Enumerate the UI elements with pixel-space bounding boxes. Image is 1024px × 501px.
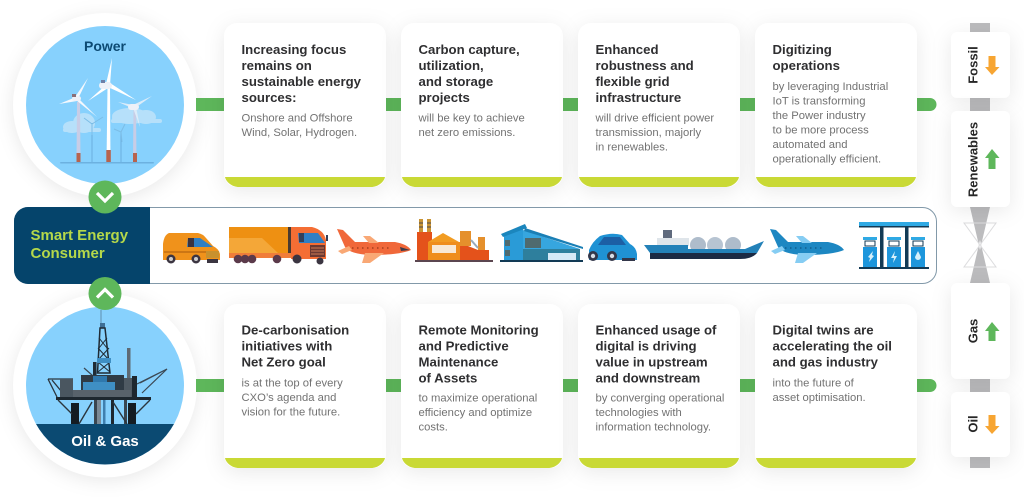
text block: Net Zero goal xyxy=(242,354,326,370)
panel: card enhanced usage of digital xyxy=(578,304,740,468)
icon: truck xyxy=(229,227,328,264)
panel: card grid infrastructure xyxy=(578,23,740,187)
heading: Smart Energy Consumer xyxy=(30,227,129,262)
button: chevron down xyxy=(88,180,122,214)
icon: down arrow xyxy=(985,415,1000,434)
panel: card digital twins xyxy=(755,304,917,468)
text block: into the future of xyxy=(772,378,855,390)
icon: wind turbines xyxy=(59,58,162,164)
icon: blue plane xyxy=(770,229,844,263)
text block: sustainable energy xyxy=(242,74,362,89)
text block: Digitizing xyxy=(772,42,832,57)
panel: card increasing focus xyxy=(224,23,386,187)
text block: Carbon capture, xyxy=(418,42,520,57)
text block: De-carbonisation xyxy=(242,322,349,338)
icon: LNG tanker ship xyxy=(644,230,764,259)
text block: to be more process xyxy=(772,124,869,136)
connectors: green links of top row xyxy=(196,98,937,111)
text block: net zero emissions. xyxy=(418,127,515,139)
text block xyxy=(242,42,362,139)
connectors: green links of bottom row xyxy=(196,379,937,392)
text block: will drive efficient power xyxy=(594,112,714,124)
text block: Digital twins are xyxy=(772,322,874,338)
icon: factory xyxy=(415,219,493,262)
panel: side label renewables xyxy=(951,111,1010,207)
text block: CXO’s agenda and xyxy=(242,392,336,404)
text block: initiatives with xyxy=(242,338,332,354)
panel: card de-carbonisation xyxy=(224,304,386,468)
text block: Increasing focus xyxy=(242,42,346,57)
text block: and downstream xyxy=(596,370,700,386)
text block: flexible grid xyxy=(596,74,670,89)
text block: utilization, xyxy=(418,58,484,73)
text block: value in upstream xyxy=(596,354,708,370)
text block: infrastructure xyxy=(596,90,681,105)
panel: side label oil xyxy=(951,392,1010,457)
text block: projects xyxy=(418,90,470,105)
text block: in renewables. xyxy=(596,142,668,154)
panel: card remote monitoring xyxy=(401,304,563,468)
text block: Onshore and Offshore xyxy=(242,112,353,124)
icon: offshore oil rig xyxy=(48,310,167,424)
text block xyxy=(596,322,724,434)
text block: automated and xyxy=(772,139,848,151)
text block: efficiency and optimize xyxy=(418,407,532,419)
panel: card digitizing operations xyxy=(755,23,917,187)
icon: up arrow xyxy=(985,149,1000,169)
icon: van xyxy=(163,233,220,264)
text block: Maintenance xyxy=(418,354,498,370)
text block: by converging operational xyxy=(596,392,724,404)
text block: of Assets xyxy=(418,370,477,386)
text block: IoT is transforming xyxy=(772,96,865,108)
label: Oil xyxy=(966,415,980,433)
text block: Wind, Solar, Hydrogen. xyxy=(242,127,357,139)
text block: sources: xyxy=(242,90,296,105)
text block xyxy=(772,42,888,166)
text block xyxy=(772,322,892,404)
icon: blue car xyxy=(588,234,637,261)
text block: accelerating the oil xyxy=(772,338,892,354)
side column: gray energy-mix connector bars xyxy=(970,23,990,468)
icon: hourglass connector between renewables and gas xyxy=(964,207,996,283)
panel: card carbon capture xyxy=(401,23,563,187)
label: Renewables xyxy=(966,122,980,197)
text block xyxy=(418,42,525,139)
text block: technologies with xyxy=(596,407,682,419)
panel: side label gas xyxy=(951,283,1010,379)
icon: blue house xyxy=(500,224,583,262)
icon: down arrow xyxy=(985,56,1000,75)
icon: orange plane xyxy=(337,229,411,263)
text block: and storage xyxy=(418,74,493,89)
text block: and gas industry xyxy=(772,354,879,370)
heading: Smart Energy Consumer: Smart Energy xyxy=(30,227,129,244)
panel: smart energy consumer band xyxy=(14,207,936,284)
label: Fossil xyxy=(966,46,980,84)
heading: Oil & Gas: Oil & Gas xyxy=(71,433,139,450)
text block: remains on xyxy=(242,58,312,73)
label: Gas xyxy=(966,319,980,343)
text block: operations xyxy=(772,58,840,73)
panel: power sector circle xyxy=(13,13,197,197)
text block: digital is driving xyxy=(596,338,697,354)
text block: operationally efficient. xyxy=(772,154,881,166)
panel: oil and gas sector circle xyxy=(13,294,197,478)
heading: Smart Energy Consumer: Consumer xyxy=(30,245,105,262)
text block xyxy=(242,322,349,418)
text block: Enhanced usage of xyxy=(596,322,717,338)
text block: the Power industry xyxy=(772,110,866,122)
panel: side label fossil xyxy=(951,32,1010,98)
text block: vision for the future. xyxy=(242,406,340,418)
text block: to maximize operational xyxy=(418,392,537,404)
text block: Enhanced xyxy=(596,42,659,57)
icon: up arrow xyxy=(985,322,1000,341)
heading: Power: Power xyxy=(84,38,127,54)
text block: and Predictive xyxy=(418,338,509,354)
text block: information technology. xyxy=(596,422,711,434)
text block: transmission, majorly xyxy=(596,127,702,139)
button: chevron up xyxy=(88,277,122,310)
text block: is at the top of every xyxy=(242,378,343,390)
text block xyxy=(594,42,714,154)
text block: costs. xyxy=(418,422,448,434)
text block: Remote Monitoring xyxy=(418,322,539,338)
text block: asset optimisation. xyxy=(772,392,866,404)
text block: robustness and xyxy=(596,58,694,73)
text block: by leveraging Industrial xyxy=(772,81,888,93)
icon: fuel station xyxy=(859,222,929,269)
text block: will be key to achieve xyxy=(418,112,525,124)
text block xyxy=(418,322,539,434)
